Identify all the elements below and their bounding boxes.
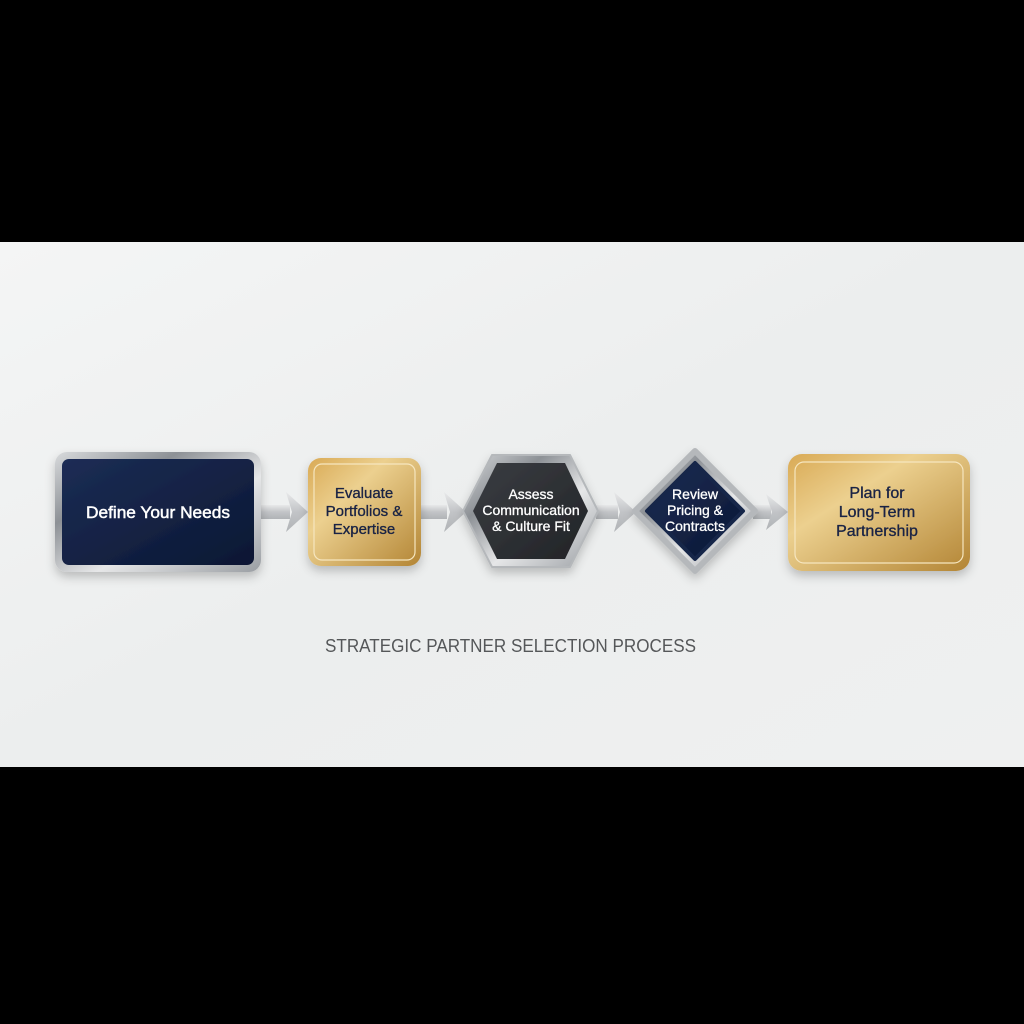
step 2: Evaluate Portfolios: Portfolios & (326, 503, 402, 520)
caption: STRATEGIC PARTNER SELECTION PROCESS (325, 636, 696, 656)
step 2: Evaluate Portfolios (308, 458, 421, 566)
arrow: 1 to 2 (258, 492, 308, 532)
step 4: Review Pricing: Review (672, 486, 719, 502)
step 4: Review Pricing (635, 451, 755, 571)
step 3: Assess Communication: Assess (508, 486, 554, 502)
arrow: 4 to 5 (753, 494, 788, 530)
step 5: Plan for Long-Term Partnership: Plan for (849, 485, 905, 502)
arrow: 2 to 3 (419, 492, 466, 532)
step 4: Review Pricing: Pricing & (667, 502, 724, 518)
step 3: Assess Communication: Communication (482, 502, 580, 518)
step 5: Plan for Long-Term Partnership (788, 454, 970, 571)
step 5: Plan for Long-Term Partnership: Partnership (836, 523, 918, 540)
step 2: Evaluate Portfolios: Evaluate (335, 485, 393, 502)
step 5: Plan for Long-Term Partnership: Long-Term (839, 504, 915, 521)
background panel (0, 242, 1024, 767)
step 3: Assess Communication (463, 455, 598, 567)
step 1: Define Your Needs (55, 452, 261, 572)
step 3: Assess Communication: & Culture Fit (492, 518, 570, 534)
step 4: Review Pricing: Contracts (665, 518, 725, 534)
arrow: 3 to 4 (596, 492, 636, 532)
step 2: Evaluate Portfolios: Expertise (333, 521, 395, 538)
step 1: Define Your Needs: Define Your Needs (86, 503, 230, 522)
